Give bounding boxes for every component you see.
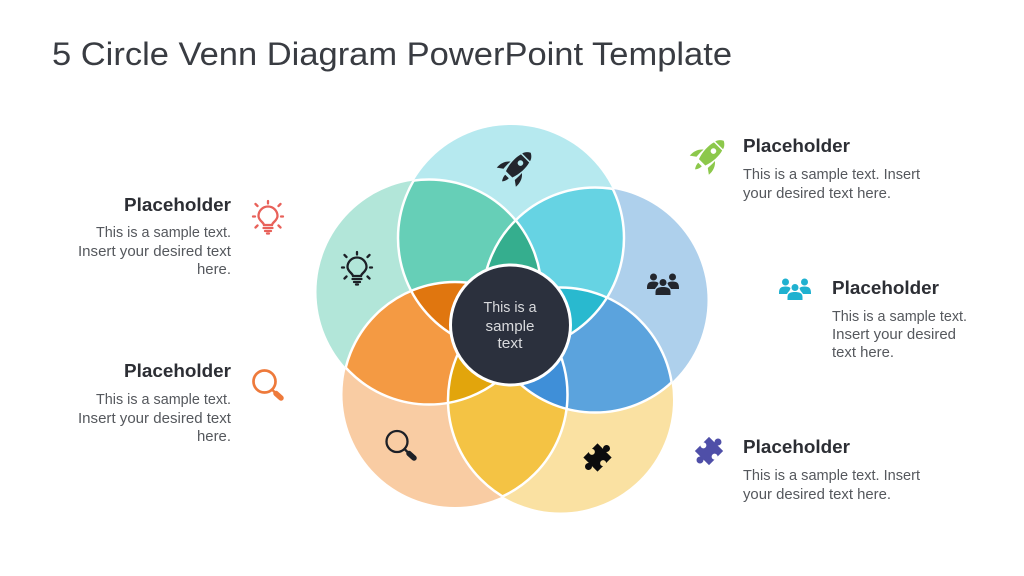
body text: This is a sample text.	[96, 392, 231, 408]
venn diagram	[316, 125, 708, 512]
callout: bottom right	[690, 432, 920, 503]
heading: Placeholder	[743, 135, 850, 156]
callout: bottom left	[78, 360, 281, 445]
icon: orange magnifier	[254, 370, 281, 398]
lens: bottom left and left	[347, 292, 456, 404]
triple overlap: green	[488, 222, 538, 270]
heading: Placeholder	[124, 194, 231, 215]
circle: left	[316, 180, 542, 404]
icon: red bulb	[253, 201, 283, 234]
triple overlap: orange	[413, 283, 465, 332]
center circle	[450, 265, 570, 385]
body text	[78, 225, 231, 278]
body text: This is a sample text. Insert	[743, 167, 920, 183]
lens: top and left	[399, 180, 514, 290]
center text: sample	[486, 319, 534, 335]
callout: top right	[685, 131, 920, 202]
body text	[832, 309, 967, 361]
body text: here.	[197, 262, 231, 278]
body text: This is a sample text.	[96, 225, 231, 241]
triple overlap: gold	[449, 357, 492, 402]
body text: This is a sample text. Insert	[743, 468, 920, 484]
icon: cyan people	[779, 278, 811, 300]
circle: top	[398, 125, 624, 351]
body text	[78, 392, 231, 445]
body text: your desired text here.	[743, 487, 891, 503]
heading: Placeholder	[124, 360, 231, 381]
icon: magnifier in circle	[386, 431, 414, 458]
body text: Insert your desired	[832, 327, 956, 343]
center text: text	[498, 336, 522, 352]
body text: Insert your desired text	[78, 244, 231, 260]
body text	[743, 167, 920, 202]
center text	[484, 300, 537, 352]
triple overlap: blue	[523, 360, 566, 408]
circle: bottom left	[342, 282, 568, 507]
lens: top and right	[518, 188, 623, 296]
icon: puzzle in circle	[579, 439, 616, 476]
icon: rocket in circle	[492, 143, 540, 191]
body text: text here.	[832, 345, 894, 361]
icon: green rocket	[685, 131, 733, 179]
icon: light bulb in circle	[342, 252, 372, 284]
center text: This is a	[484, 300, 537, 316]
lens: right and bottom right	[562, 299, 670, 412]
lens: bottom right and bottom left	[449, 384, 566, 495]
icon: purple puzzle	[690, 432, 728, 470]
heading: Placeholder	[743, 436, 850, 457]
body text: Insert your desired text	[78, 411, 231, 427]
circle: right	[482, 188, 708, 412]
triple overlap: teal	[560, 288, 605, 332]
circle: bottom right	[448, 288, 673, 512]
heading: Placeholder	[832, 277, 939, 298]
white overlap outlines	[344, 178, 673, 497]
body text	[743, 468, 920, 503]
body text: here.	[197, 429, 231, 445]
body text: your desired text here.	[743, 186, 891, 202]
title: 5 Circle Venn Diagram PowerPoint Template	[52, 36, 732, 72]
body text: This is a sample text.	[832, 309, 967, 325]
icon: people in circle	[647, 274, 679, 295]
callout: middle right	[779, 277, 967, 361]
callout: top left	[78, 194, 283, 278]
